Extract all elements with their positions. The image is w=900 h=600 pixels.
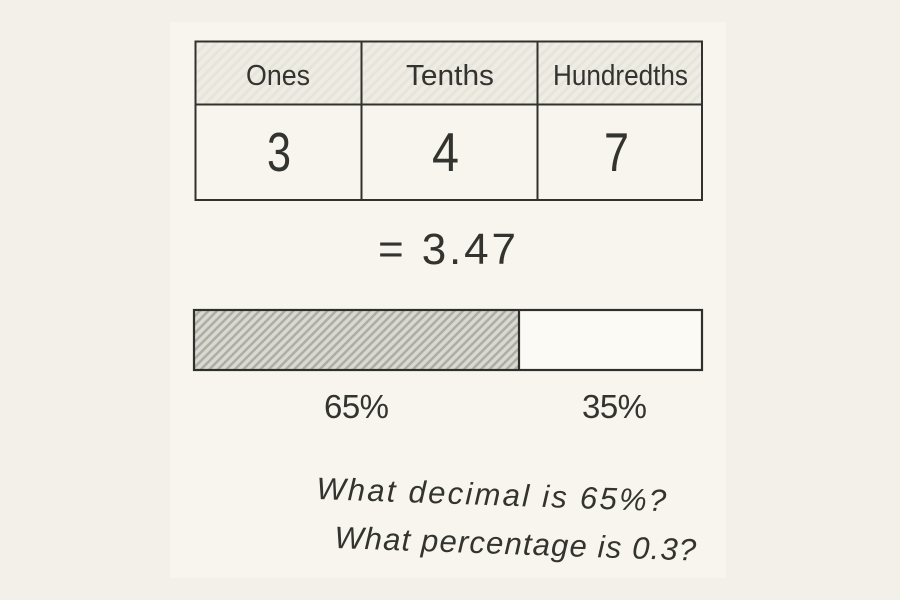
digit: 4: 4 (432, 121, 459, 183)
label: 35%: 35% (582, 388, 647, 425)
digit: 7: 7 (604, 121, 629, 183)
question one: What decimal is 65%? (316, 471, 668, 518)
digit: 3: 3 (267, 121, 291, 183)
column header: Tenths: Tenths (406, 60, 494, 92)
shaded 65 percent segment (194, 310, 519, 370)
place value table (195, 41, 702, 200)
bar outline (194, 310, 702, 370)
percentage bar (194, 310, 702, 370)
question two: What percentage is 0.3? (334, 520, 698, 568)
column header: Ones: Ones (246, 60, 310, 92)
unshaded 35 percent segment (519, 310, 702, 370)
paper background (170, 22, 726, 578)
column header: Hundredths: Hundredths (553, 60, 688, 92)
label: 65%: 65% (324, 388, 389, 425)
table header shading (196, 42, 701, 104)
table grid (195, 41, 702, 200)
decimal result: = 3.47 (378, 225, 516, 274)
